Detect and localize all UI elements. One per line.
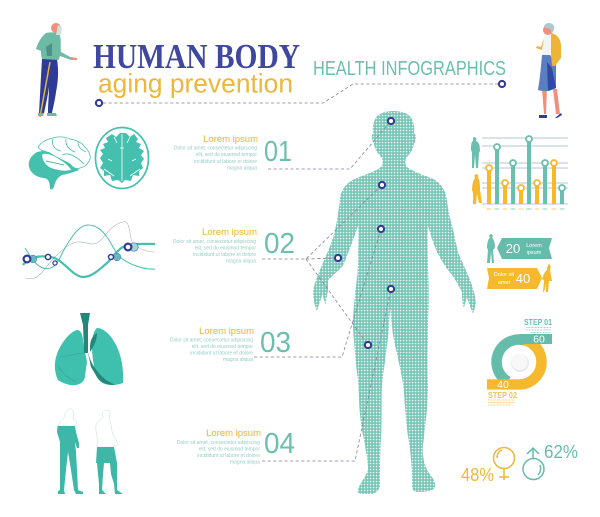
text block 01: magna aliqua: [227, 166, 257, 172]
bar labels: 60%: [510, 207, 516, 211]
teal figure: [471, 137, 480, 168]
ribbon: 20 lorem ipsum: 20: [506, 241, 520, 256]
bar labels: 10%: [534, 207, 540, 211]
ribbon: dolor sit amet 40: [487, 264, 552, 292]
text block 04: 04: [264, 428, 295, 460]
male percentage: [523, 442, 578, 480]
title: HUMAN BODY: [93, 37, 300, 76]
text block 04: incididunt ut labore et dolore: [197, 453, 260, 459]
bar chart: [471, 136, 568, 211]
ribbon: dolor sit amet 40: Dolor sit: [494, 272, 515, 278]
text block 03: incididunt ut labore et dolore: [190, 350, 253, 356]
text block 01: [174, 134, 292, 172]
body silhouette: [313, 111, 476, 494]
text block 02: Lorem ipsum: [202, 227, 257, 238]
text block 04: Lorem ipsum: [206, 428, 261, 439]
text block 03: Lorem ipsum: [199, 326, 254, 337]
step 02 label: STEP 02: [488, 390, 517, 400]
ribbon: dolor sit amet 40: 40: [516, 271, 530, 286]
title: aging prevention: [98, 68, 293, 98]
text block 03: elit, sed do eiusmod tempor: [192, 344, 253, 350]
donut chart: 60: [533, 334, 545, 346]
icon: lungs: [55, 313, 123, 385]
text block 02: [173, 227, 295, 264]
bar labels: 62%: [494, 207, 500, 211]
connector dashed lines: [103, 84, 500, 461]
marker dots: [96, 81, 505, 348]
donut chart: [487, 317, 552, 405]
icon: elderly woman: [536, 23, 562, 118]
bar labels: 60%: [542, 207, 548, 211]
title: [93, 37, 300, 98]
ribbon: 20 lorem ipsum: ipsum: [527, 250, 542, 256]
bars: [486, 136, 565, 204]
text block 01: 01: [264, 136, 292, 168]
bar labels: 15%: [559, 207, 565, 211]
bar labels: 17%: [518, 207, 524, 211]
text block 03: [170, 326, 291, 363]
text block 01: Dolor sit amet, consectetur adipiscing: [174, 146, 257, 152]
text block 03: 03: [260, 327, 291, 359]
icon: nerve waves: [23, 222, 155, 279]
teal figure: [487, 234, 495, 263]
ribbon: dolor sit amet 40: amet: [498, 280, 511, 286]
icon: elderly man with cane: [36, 23, 77, 117]
female percentage: [461, 448, 514, 485]
text block 03: magna aliqua: [223, 357, 253, 363]
icon: brain side view: [29, 137, 90, 189]
step 01 label: STEP 01: [524, 317, 552, 327]
bar labels: 100%: [526, 207, 533, 211]
donut chart: 40: [497, 379, 509, 391]
text block 02: Dolor sit amet, consectetur adipiscing: [173, 239, 256, 245]
text block 01: elit, sed do eiusmod tempor: [196, 152, 257, 158]
text block 02: magna aliqua: [226, 258, 256, 264]
bar labels: 30%: [486, 207, 492, 211]
heading: health infographics: HEALTH INFOGRAPHICS: [313, 58, 506, 80]
text block 01: Lorem ipsum: [203, 134, 258, 145]
orange figure: [542, 264, 552, 292]
icon: brain scan top view: [96, 128, 148, 188]
text block 04: Dolor sit amet, consectetur adipiscing: [177, 440, 260, 446]
bar labels: 10%: [502, 207, 508, 211]
text block 02: 02: [264, 228, 295, 260]
text block 02: incididunt ut labore et dolore: [193, 252, 256, 258]
text block 03: Dolor sit amet, consectetur adipiscing: [170, 338, 253, 344]
text block 04: [177, 428, 295, 466]
icon: male figure outline: [57, 409, 83, 494]
male percentage: 62%: [544, 442, 578, 462]
icon: female figure outline: [96, 410, 123, 494]
bar labels: [486, 207, 565, 211]
text block 01: incididunt ut labore et dolore: [194, 159, 257, 165]
bar labels: 60%: [551, 207, 557, 211]
text block 02: elit, sed do eiusmod tempor: [195, 246, 256, 252]
ribbon: 20 lorem ipsum: [487, 234, 552, 263]
ribbon: 20 lorem ipsum: Lorem: [526, 243, 542, 249]
female percentage: 48%: [461, 465, 494, 485]
text block 04: elit, sed do eiusmod tempor: [199, 446, 260, 452]
text block 04: magna aliqua: [230, 460, 260, 466]
orange figure: [472, 174, 482, 204]
